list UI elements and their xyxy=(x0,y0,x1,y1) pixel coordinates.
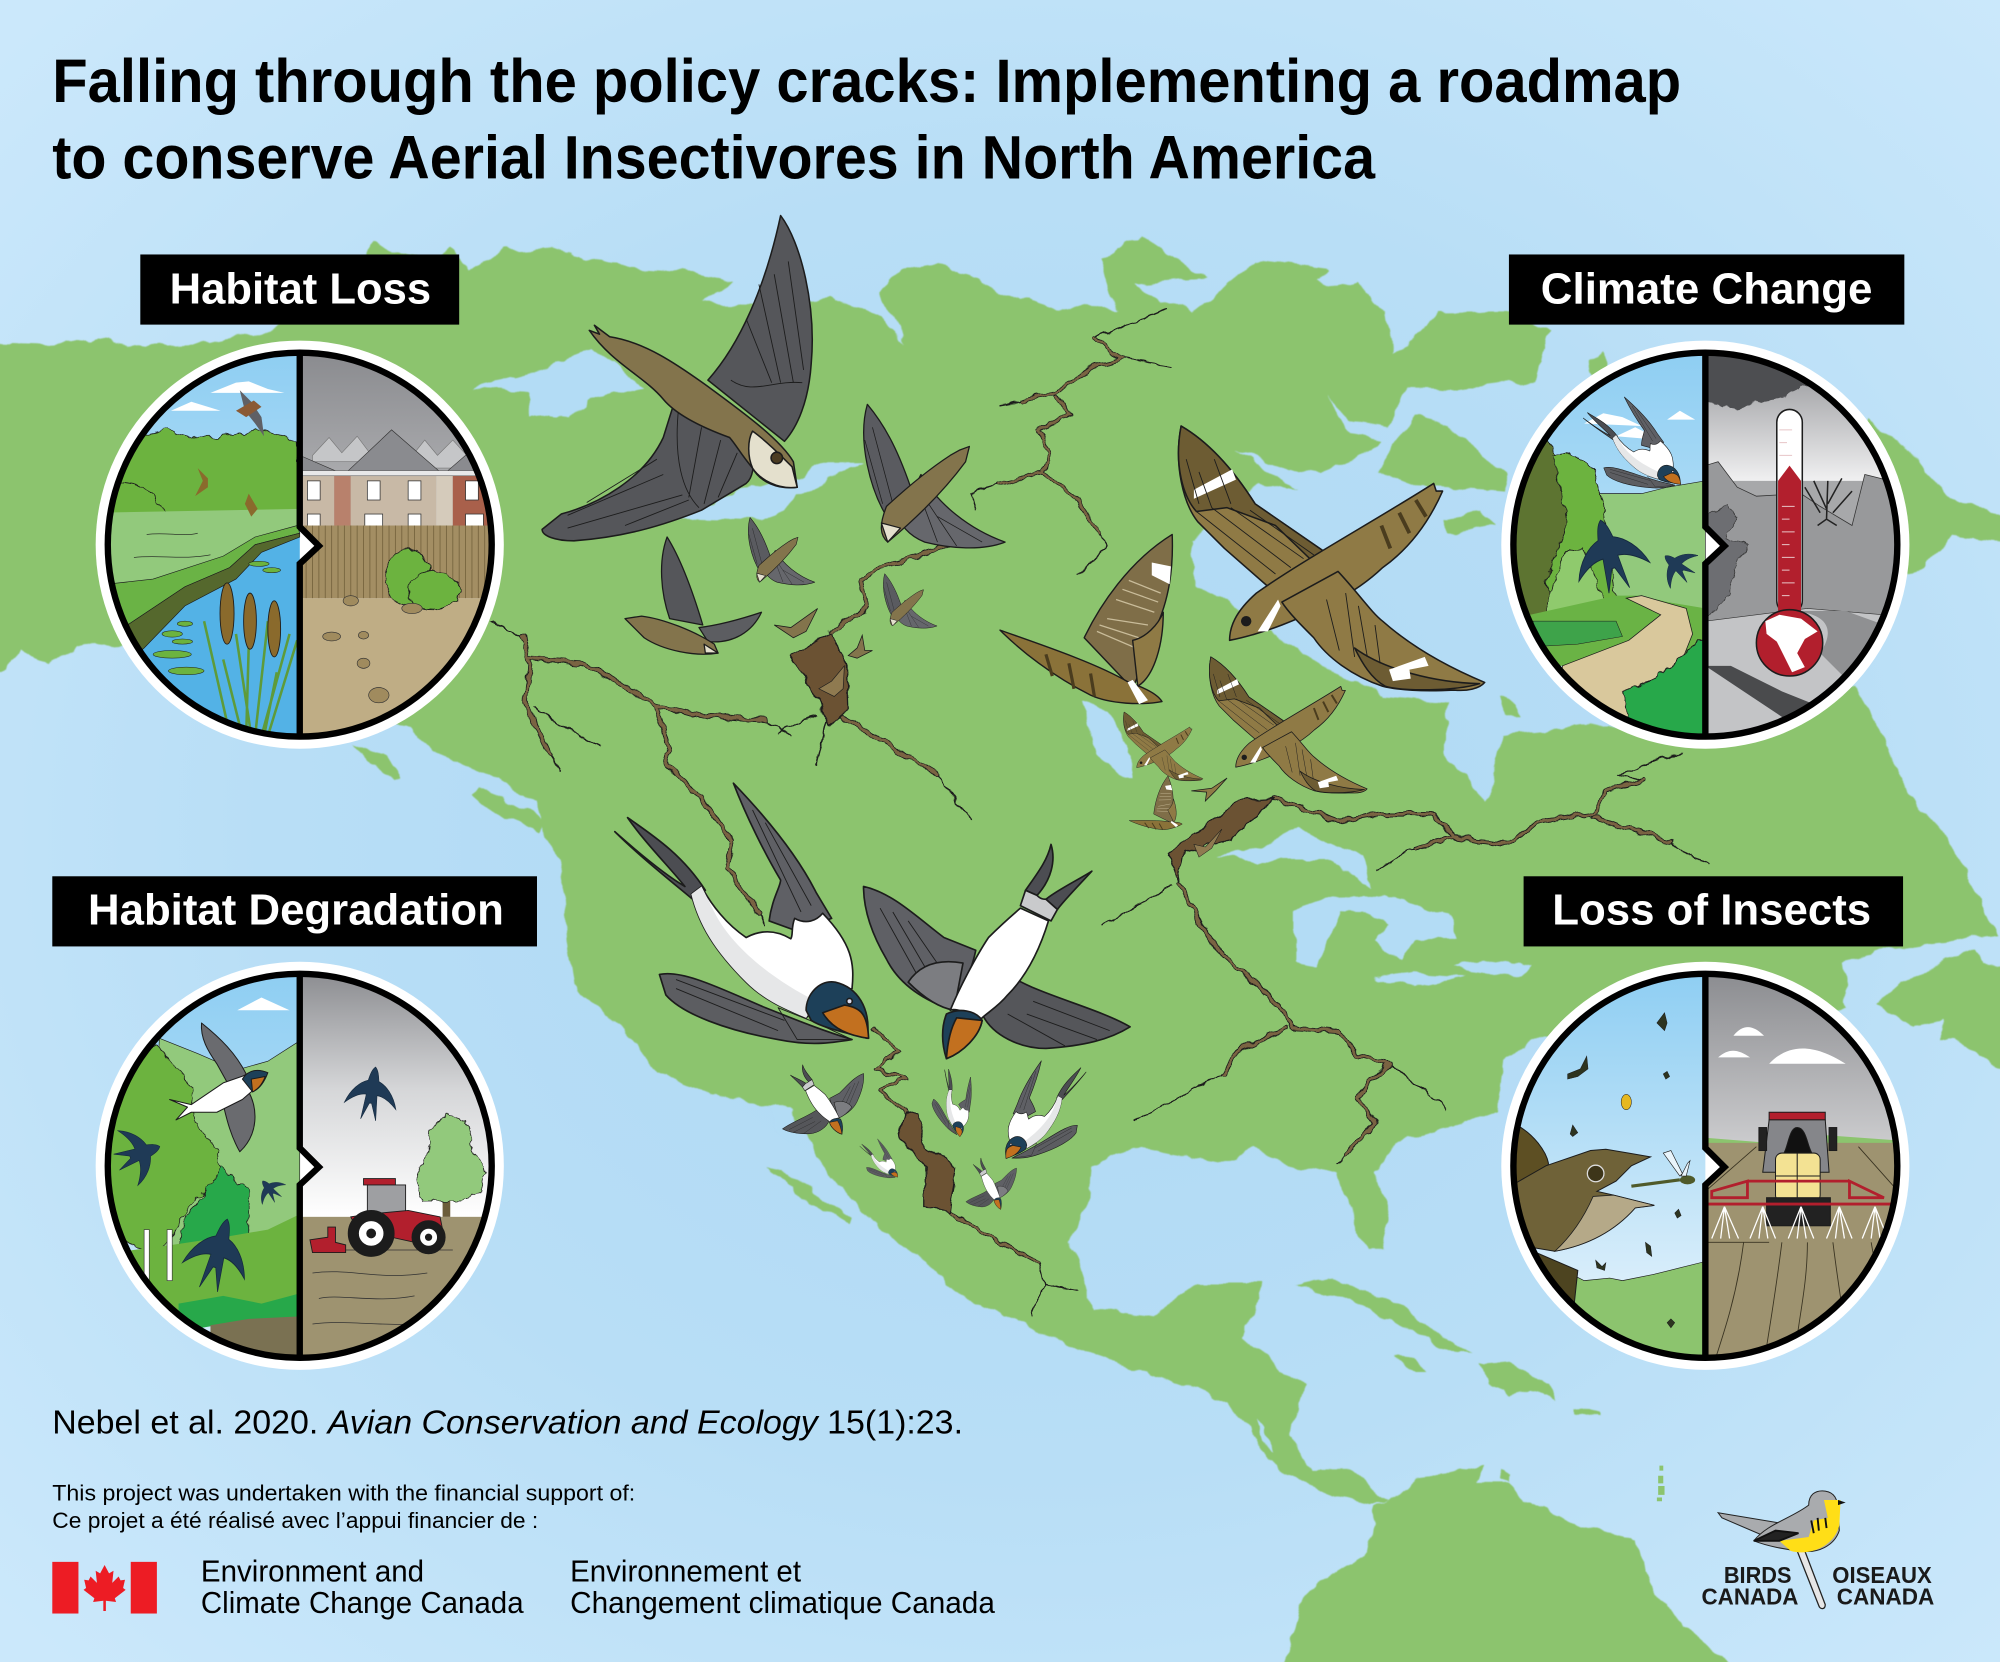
swift 3 xyxy=(625,537,761,654)
heading: climate change: Climate Change xyxy=(1541,266,1872,314)
panel: habitat loss xyxy=(96,341,504,749)
tractor xyxy=(310,1179,445,1256)
logo: Birds Canada: CANADA xyxy=(1702,1584,1798,1610)
small swift xyxy=(748,517,815,585)
sprayer xyxy=(1705,1112,1909,1226)
panel: climate change xyxy=(1501,341,1909,749)
intact habitat side xyxy=(111,356,300,734)
heading: habitat degradation: Habitat Degradation xyxy=(88,887,504,935)
thermometer xyxy=(1756,409,1823,676)
Baja California xyxy=(765,1167,852,1227)
tiny nightjar xyxy=(1191,778,1227,801)
coastal islands xyxy=(353,355,2000,1482)
logo: Birds Canada: CANADA xyxy=(1837,1584,1934,1610)
ring and divider xyxy=(300,974,319,1357)
small swallow xyxy=(966,1158,1017,1209)
large barn swallow right xyxy=(864,844,1130,1059)
nightjar 2 xyxy=(1000,534,1172,704)
crack: central xyxy=(778,545,969,819)
nightjar 3 xyxy=(1209,657,1367,793)
large chimney swift xyxy=(542,216,812,541)
Lake Athabasca xyxy=(676,464,861,522)
large barn swallow left xyxy=(615,783,869,1043)
South America xyxy=(1276,1464,1760,1662)
Great Lakes xyxy=(1217,829,1532,989)
icon: Canadian flag xyxy=(52,1562,157,1614)
Lake Winnipeg xyxy=(1083,699,1135,778)
small Caribbean islands xyxy=(1657,1466,1665,1501)
Great Slave and Great Bear lakes xyxy=(474,349,644,420)
logo: Birds Canada: OISEAUX xyxy=(1832,1562,1932,1588)
tiny swift xyxy=(774,608,818,638)
agency wordmark French: Environnement et xyxy=(570,1555,801,1589)
degraded side xyxy=(302,977,488,1354)
swift flock xyxy=(542,216,1005,696)
nightjar 5 xyxy=(1119,776,1185,841)
drought side xyxy=(1708,356,1894,734)
agency wordmark English: Climate Change Canada xyxy=(201,1586,525,1620)
lakes and inland water xyxy=(474,349,1532,1452)
heading: climate change xyxy=(1509,254,1904,325)
funding statement xyxy=(52,1481,635,1533)
dragonfly xyxy=(1631,1151,1695,1186)
crack: arctic xyxy=(972,309,1171,577)
insect-rich side xyxy=(1516,977,1706,1355)
healthy side xyxy=(1516,356,1706,734)
agency wordmark English xyxy=(201,1555,525,1620)
healthy side xyxy=(110,977,300,1354)
crack: Great Plains and eastern xyxy=(1102,751,1708,1162)
swift 2 xyxy=(864,404,1005,548)
swallow in flight xyxy=(170,1023,268,1152)
small swift xyxy=(883,574,937,628)
swift inside crack xyxy=(819,666,844,696)
heading: habitat loss xyxy=(140,254,459,325)
large nightjar xyxy=(1178,426,1485,691)
agency wordmark French xyxy=(570,1555,996,1620)
panel: habitat degradation xyxy=(96,962,504,1370)
developed side xyxy=(302,356,488,734)
barn swallow flock xyxy=(615,783,1130,1209)
nightjar 4 xyxy=(1123,712,1203,781)
funding statement: This project was undertaken with the financial support of: xyxy=(52,1481,635,1506)
heading: loss of insects xyxy=(1524,876,1903,946)
Lake Nicaragua xyxy=(1256,1418,1272,1452)
ring and divider xyxy=(300,353,319,736)
cracks in the policy map xyxy=(491,309,1708,1315)
citation: Nebel et al. 2020. Avian Conservation and Ecology 15(1):23. xyxy=(52,1405,963,1442)
ring and divider xyxy=(1705,974,1724,1357)
heading: habitat degradation xyxy=(52,876,537,946)
nightjar inside crack xyxy=(1194,829,1222,857)
ring and divider xyxy=(1705,353,1724,736)
nightjar flock xyxy=(1000,426,1485,857)
heading: habitat loss: Habitat Loss xyxy=(170,266,431,314)
small insects xyxy=(1568,1013,1681,1328)
agency wordmark English: Environment and xyxy=(201,1555,424,1589)
small swallow xyxy=(917,1062,993,1138)
North America landmass xyxy=(0,235,1995,1505)
small swallow xyxy=(860,1139,898,1178)
crack: Mexico xyxy=(874,1028,1078,1315)
title: to conserve Aerial Insectivores in North America xyxy=(52,124,1376,192)
title: Falling through the policy cracks: Implementing a roadmap xyxy=(52,47,1681,115)
heading: loss of insects: Loss of Insects xyxy=(1552,887,1871,935)
small swallow xyxy=(777,1059,868,1140)
sprayed field side xyxy=(1708,977,1894,1354)
small swallow xyxy=(993,1055,1097,1160)
agency wordmark French: Changement climatique Canada xyxy=(570,1586,996,1620)
panel: loss of insects xyxy=(1501,962,1909,1370)
logo: Birds Canada xyxy=(1702,1491,1934,1610)
funding statement: Ce projet a été réalisé avec l’appui financier de : xyxy=(52,1508,538,1533)
title xyxy=(52,47,1681,192)
tiny swift xyxy=(848,635,872,658)
Gulf of California xyxy=(768,1107,801,1148)
logo: Birds Canada: BIRDS xyxy=(1724,1562,1791,1588)
crack: north-west xyxy=(491,621,791,925)
